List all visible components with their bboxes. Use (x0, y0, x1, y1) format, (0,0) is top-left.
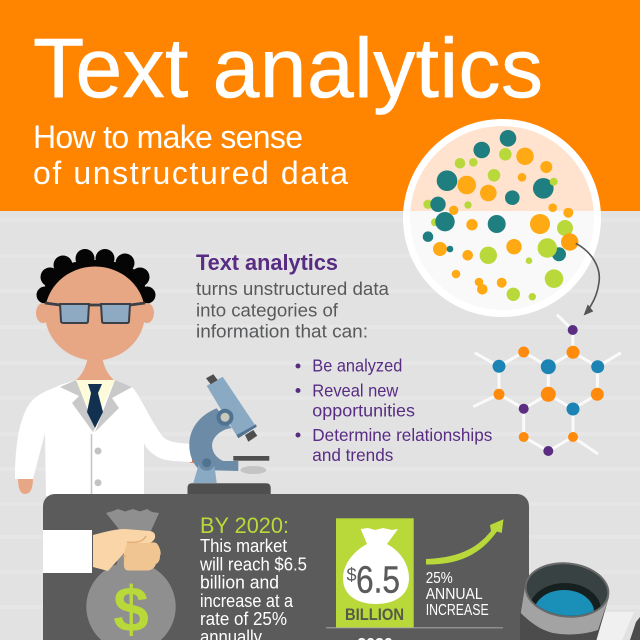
by 2020 text (199, 513, 307, 640)
annual increase label: 25% (426, 570, 453, 587)
hair (36, 249, 156, 310)
arm (189, 408, 238, 471)
stage (233, 456, 269, 461)
ears (36, 303, 154, 323)
lab coat (15, 380, 192, 496)
focus gear (216, 409, 234, 426)
bullet list (296, 356, 493, 465)
title: Text analytics (33, 21, 543, 115)
hand holding bag (93, 529, 161, 571)
annual increase label (426, 570, 489, 619)
by 2020 text: will reach $6.5 (199, 554, 307, 574)
shirt collar (75, 380, 115, 422)
bullet list: Be analyzed (312, 356, 402, 376)
bullet list: opportunities (312, 401, 415, 421)
microscope (188, 374, 271, 497)
by 2020 text: billion and (200, 572, 279, 592)
by 2020 text: BY 2020: (200, 513, 289, 538)
dark statistics panel (43, 494, 529, 640)
subtitle: How to make sense (33, 119, 303, 155)
second lens edge (630, 617, 640, 640)
subtitle (33, 119, 348, 191)
lapels (60, 380, 132, 432)
glasses (45, 303, 145, 323)
tube (207, 377, 255, 437)
intro paragraph: information that can: (196, 322, 368, 342)
green 6.5 billion box: 6.5 (356, 560, 400, 602)
foot (193, 460, 217, 483)
green 6.5 billion box: BILLION (345, 605, 404, 624)
head (45, 266, 145, 360)
hand at microscope (188, 451, 196, 463)
by 2020 text: rate of 25% (200, 609, 287, 629)
neck (75, 355, 115, 381)
by 2020 text: This market (200, 536, 287, 556)
intro text block (196, 250, 390, 342)
green 6.5 billion box: $ (346, 565, 357, 585)
bullet list: Determine relationships (312, 425, 493, 445)
light strap behind lens (592, 612, 634, 640)
intro paragraph: turns unstructured data (196, 279, 390, 299)
intro heading: Text analytics (196, 250, 338, 275)
subtitle: of unstructured data (33, 155, 348, 191)
curved arrow from data to molecule (576, 243, 599, 314)
scientist (15, 249, 196, 496)
molecule network (473, 315, 621, 456)
growth arrow (426, 519, 504, 565)
money bag (86, 509, 176, 640)
intro paragraph: into categories of (196, 301, 339, 321)
coat placket and buttons (92, 434, 102, 496)
hand at left (18, 478, 33, 494)
intro paragraph (196, 279, 390, 342)
by 2020 text: increase at a (200, 591, 294, 611)
axis line (326, 627, 503, 628)
lens (520, 558, 612, 640)
sleeve (43, 530, 92, 573)
base (188, 483, 271, 497)
header band (0, 0, 640, 211)
annual increase label: ANNUAL (426, 586, 483, 603)
green 6.5 billion box (336, 518, 414, 628)
bullet list: Reveal new (312, 381, 399, 401)
bullet list: and trends (312, 445, 394, 465)
tie (87, 384, 103, 428)
circle of unstructured data dots (403, 119, 601, 317)
annual increase label: INCREASE (426, 602, 489, 619)
